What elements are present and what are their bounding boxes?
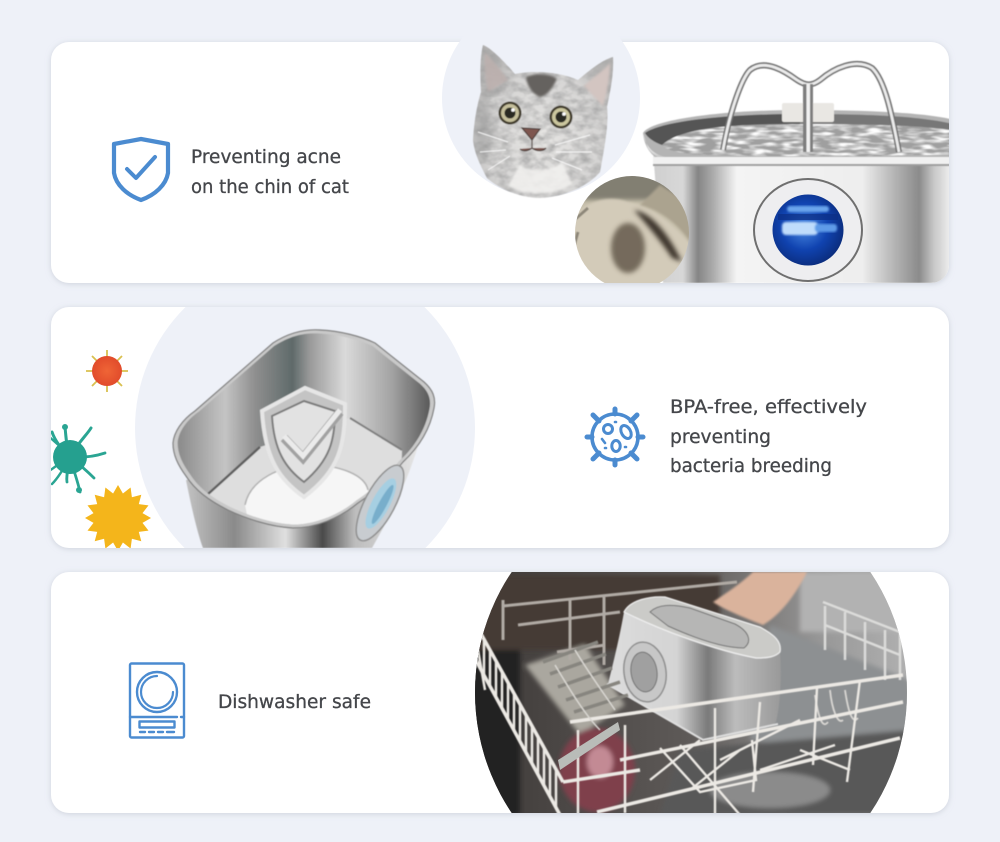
icon: shield check <box>114 139 168 200</box>
photo backdrop circle <box>442 0 640 197</box>
text: preventing acne: Preventing acne <box>191 146 341 168</box>
icon: teal germ <box>44 424 105 492</box>
hand <box>713 572 807 625</box>
fountain water level window <box>754 179 862 281</box>
upside-down fountain <box>607 597 781 740</box>
image: chin acne photo <box>575 176 689 283</box>
icon: yellow germ <box>85 485 151 551</box>
embossed shield <box>262 388 345 497</box>
icon: bacteria <box>587 409 643 465</box>
panel: preventing acne <box>49 41 951 286</box>
cat nose <box>520 128 546 151</box>
icon: red germ <box>86 350 128 392</box>
text: BPA-free: bacteria breeding <box>670 455 832 477</box>
text: BPA-free: BPA-free, effectively <box>670 396 867 418</box>
bowl water window <box>355 464 405 542</box>
dish rack wires <box>473 582 903 815</box>
image: cat head <box>470 44 616 199</box>
photo backdrop circle <box>135 307 475 548</box>
text: dishwasher safe: Dishwasher safe <box>218 691 371 713</box>
image: stainless steel bowl <box>170 325 440 548</box>
panel: dishwasher safe <box>51 570 949 815</box>
panel: BPA-free <box>49 306 951 551</box>
text: preventing acne: on the chin of cat <box>191 176 349 198</box>
image: stainless steel fountain <box>643 64 960 283</box>
text: preventing acne <box>191 146 349 198</box>
icon: dishwasher <box>130 664 184 738</box>
cat eyes <box>498 102 572 128</box>
text: BPA-free <box>670 396 867 477</box>
image: fountain in dishwasher rack <box>470 570 910 815</box>
text: BPA-free: preventing <box>670 426 771 448</box>
